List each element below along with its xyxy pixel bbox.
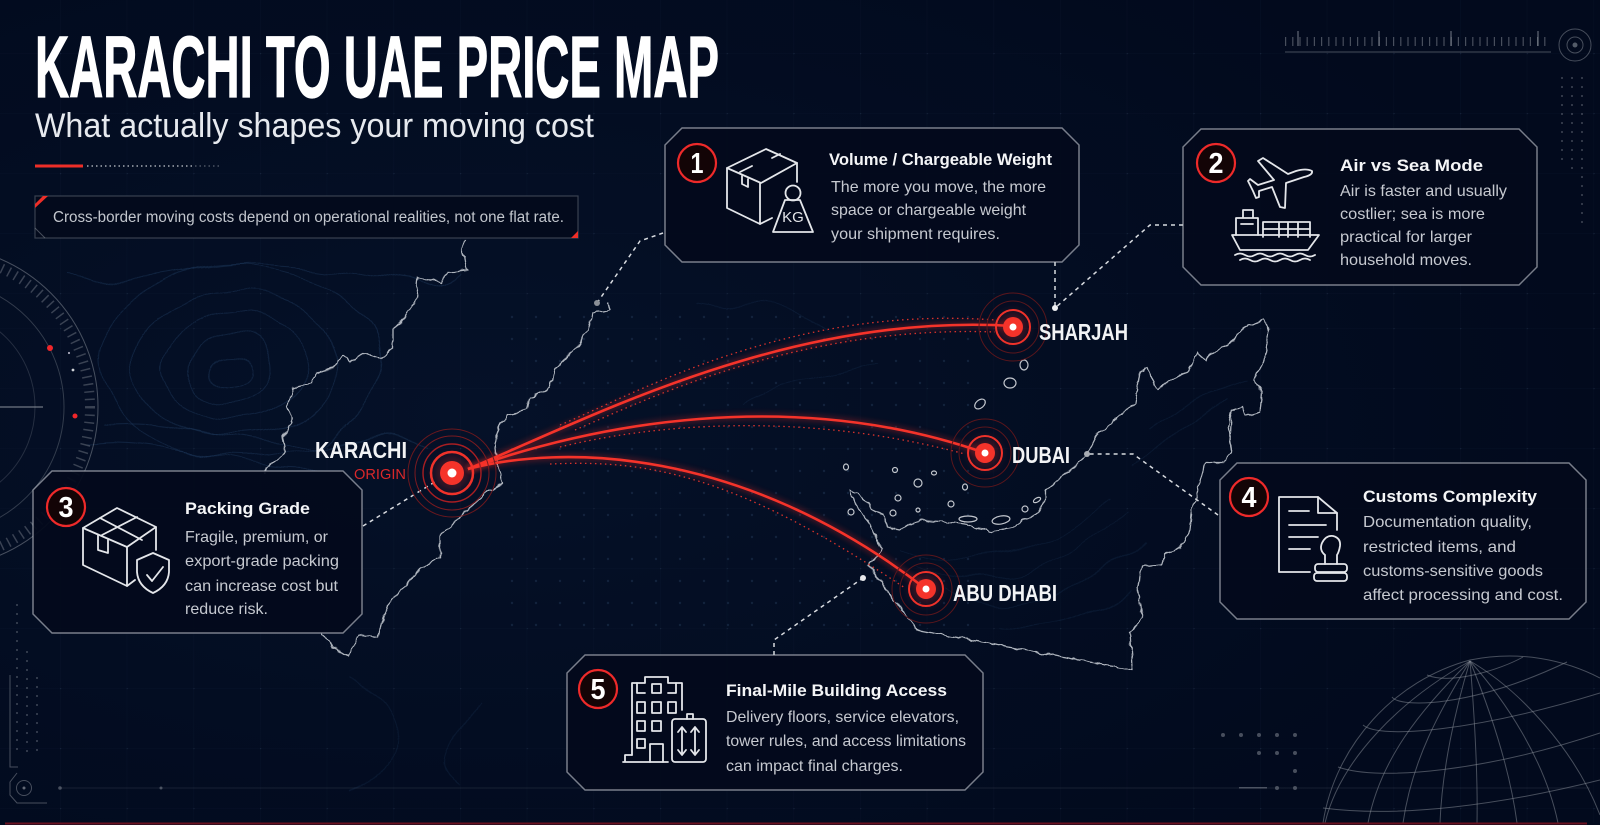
city labels: DUBAI <box>1012 442 1070 468</box>
icon: box and KG weight: KG <box>782 209 804 226</box>
badge 2: 2 <box>1208 148 1224 180</box>
description: can increase cost but <box>185 578 339 595</box>
panel: customs complexity <box>1220 463 1586 619</box>
heading: Packing Grade <box>185 499 310 518</box>
heading: Final-Mile Building Access <box>726 681 947 700</box>
topographic contours: left <box>70 263 460 471</box>
description: Delivery floors, service elevators, <box>726 709 959 726</box>
description: affect processing and cost. <box>1363 587 1563 604</box>
map: Pakistan coastline <box>265 240 610 655</box>
description: practical for larger <box>1340 229 1473 246</box>
hud target top right <box>1559 29 1591 61</box>
city labels: ABU DHABI <box>953 580 1057 606</box>
panel: air vs sea mode <box>1183 129 1537 285</box>
description <box>831 179 1046 243</box>
callout <box>35 196 578 238</box>
badge 4 <box>1230 478 1268 516</box>
bottom accent line <box>5 822 1587 824</box>
badge 5 <box>579 670 617 708</box>
pin: Abu Dhabi <box>892 555 960 623</box>
description: space or chargeable weight <box>831 202 1027 219</box>
description: restricted items, and <box>1363 539 1516 556</box>
badge 3 <box>47 488 85 526</box>
city labels <box>315 319 1128 606</box>
heading: Air vs Sea Mode <box>1340 156 1483 175</box>
panel: packing grade <box>33 471 362 633</box>
description: tower rules, and access limitations <box>726 733 966 750</box>
map: islands <box>844 360 1041 526</box>
topographic contours: UAE <box>350 300 1240 790</box>
route: Karachi to Sharjah <box>468 318 1013 469</box>
icon: building with elevator <box>623 677 706 762</box>
panel: volume / chargeable weight <box>665 128 1079 262</box>
icon: box and KG weight <box>727 149 813 232</box>
subtitle: What actually shapes your moving cost <box>35 107 595 145</box>
hud dots and target bottom left <box>10 605 1590 803</box>
route: Karachi to Abu Dhabi <box>468 457 926 589</box>
description: Documentation quality, <box>1363 514 1532 531</box>
pin: Sharjah <box>979 293 1047 361</box>
hud radar dial <box>0 246 98 568</box>
heading: Volume / Chargeable Weight <box>829 150 1052 169</box>
title divider <box>35 164 220 168</box>
panel: final-mile building access <box>567 655 983 790</box>
pin: Karachi <box>408 429 496 517</box>
description: customs-sensitive goods <box>1363 563 1543 580</box>
city labels: SHARJAH <box>1039 319 1128 345</box>
badge 2 <box>1197 144 1235 182</box>
hud dot cluster bottom <box>1221 733 1297 790</box>
description: household moves. <box>1340 252 1472 269</box>
icon: box with shield <box>83 508 169 593</box>
description <box>185 529 339 618</box>
pin: Dubai <box>951 419 1019 487</box>
title: KARACHI TO UAE PRICE MAP <box>35 19 719 116</box>
description: your shipment requires. <box>831 226 1000 243</box>
heading: Customs Complexity <box>1363 487 1538 506</box>
badge 1: 1 <box>690 148 704 180</box>
description: reduce risk. <box>185 601 268 618</box>
city labels: KARACHI <box>315 437 407 463</box>
callout: Cross-border moving costs depend on operational realities, not one flat rate. <box>53 209 564 226</box>
hud globe <box>1323 656 1600 823</box>
description: costlier; sea is more <box>1340 206 1485 223</box>
description: can impact final charges. <box>726 758 903 775</box>
badge 3: 3 <box>58 492 74 524</box>
icon: document with stamp <box>1279 497 1347 581</box>
hud ruler top right <box>1285 31 1551 52</box>
description <box>1340 183 1507 269</box>
description: export-grade packing <box>185 553 339 570</box>
description <box>1363 514 1563 604</box>
icon: plane and ship <box>1232 158 1319 262</box>
description: Air is faster and usually <box>1340 183 1507 200</box>
map: UAE outline <box>850 320 1269 670</box>
description: The more you move, the more <box>831 179 1046 196</box>
badge 4: 4 <box>1242 482 1256 514</box>
description <box>726 709 966 775</box>
badge 5: 5 <box>590 674 606 706</box>
description: Fragile, premium, or <box>185 529 329 546</box>
city labels: ORIGIN <box>354 466 406 483</box>
route: Karachi to Dubai <box>468 417 985 469</box>
hud dot column right <box>1562 78 1582 230</box>
connectors <box>363 225 1218 655</box>
badge 1 <box>678 144 716 182</box>
